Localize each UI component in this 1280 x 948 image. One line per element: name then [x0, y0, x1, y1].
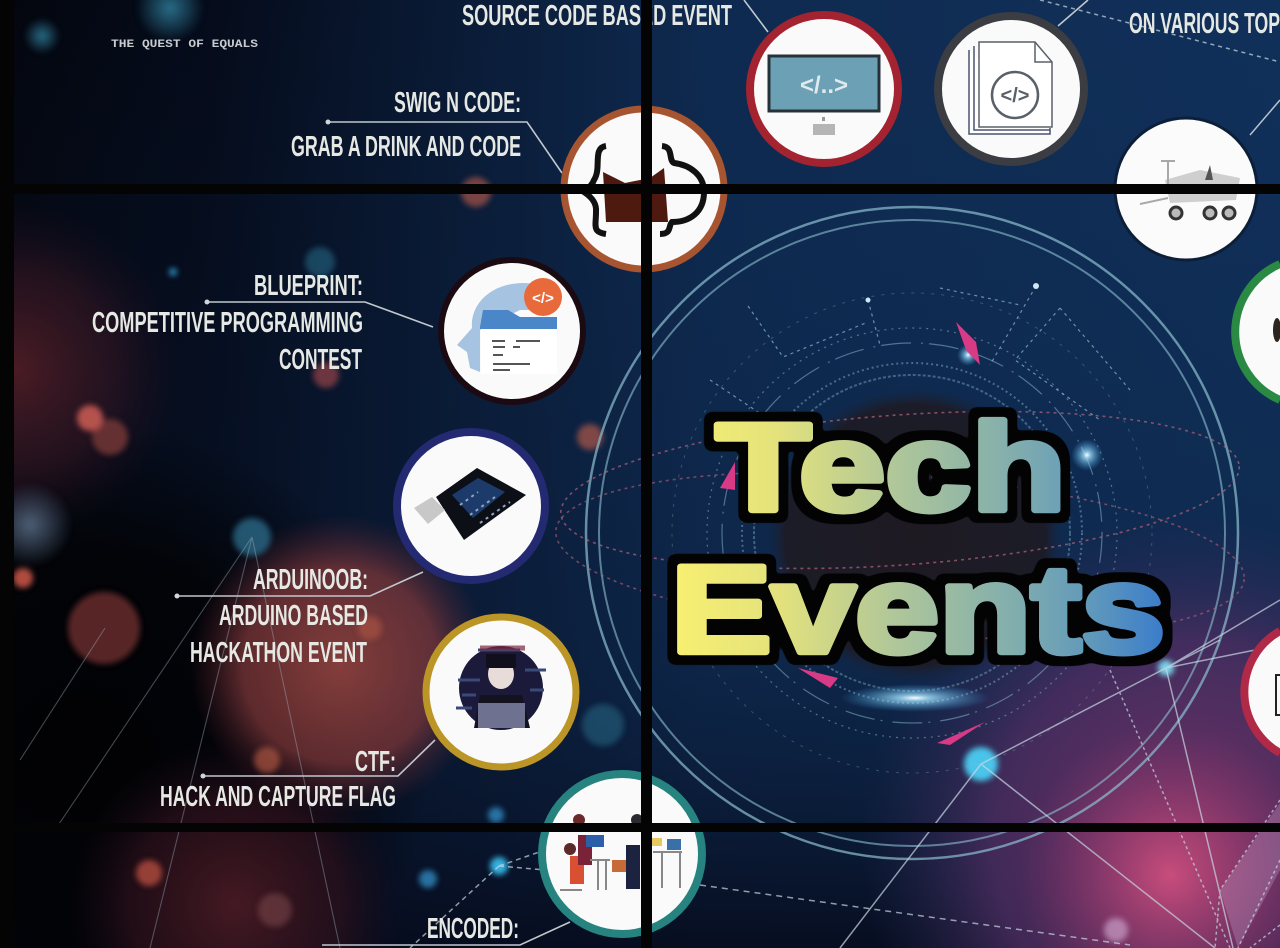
label: encoded: ENCODED:	[427, 913, 519, 945]
title: Tech Events: Tech	[716, 399, 1066, 537]
network lines	[410, 0, 1280, 948]
label: blueprint: COMPETITIVE PROGRAMMING	[92, 307, 363, 339]
label: arduinoob: HACKATHON EVENT	[190, 637, 367, 669]
icon: code document: </>	[1001, 85, 1029, 107]
title: Tech Events: Events	[671, 541, 1165, 679]
label: ctf: CTF:	[355, 746, 396, 778]
label: swig n code	[291, 87, 562, 173]
central radar rings	[550, 207, 1250, 859]
icon: encoded team	[542, 774, 702, 934]
label: blueprint: CONTEST	[279, 344, 362, 376]
label: source code based event: SOURCE CODE BASED EVENT	[462, 0, 732, 32]
lilac triangle	[1220, 803, 1280, 948]
icon: red partial circle	[1244, 631, 1280, 753]
label: swig n code: GRAB A DRINK AND CODE	[291, 131, 521, 163]
icon: mars rover	[1115, 100, 1280, 260]
label: arduinoob: ARDUINOOB:	[253, 564, 368, 596]
label: blueprint: BLUEPRINT:	[254, 270, 363, 302]
label: arduinoob: ARDUINO BASED	[219, 600, 368, 632]
label: encoded	[322, 913, 570, 945]
label: arduinoob	[174, 564, 423, 669]
label: swig n code: SWIG N CODE:	[394, 87, 521, 119]
core glows and pink shards	[720, 283, 1103, 745]
icon: blueprint head	[441, 260, 583, 402]
icon: source code monitor	[750, 15, 898, 163]
icon: source code monitor: </..>	[800, 72, 848, 99]
icon: swig n code drink	[564, 109, 724, 269]
icon: code document	[938, 16, 1084, 162]
icon: green partial circle	[1235, 264, 1280, 400]
decorative top-left tagline: THE QUEST OF EQUALS	[111, 39, 258, 51]
icon: ctf hacker	[426, 617, 576, 767]
label: ctf	[160, 740, 435, 813]
icon: blueprint head: </>	[532, 290, 554, 307]
label: on various topics	[1058, 0, 1280, 40]
label: ctf: HACK AND CAPTURE FLAG	[160, 781, 396, 813]
icon: arduino board	[397, 432, 545, 580]
title: Tech Events	[671, 399, 1165, 679]
label: blueprint	[92, 270, 433, 376]
